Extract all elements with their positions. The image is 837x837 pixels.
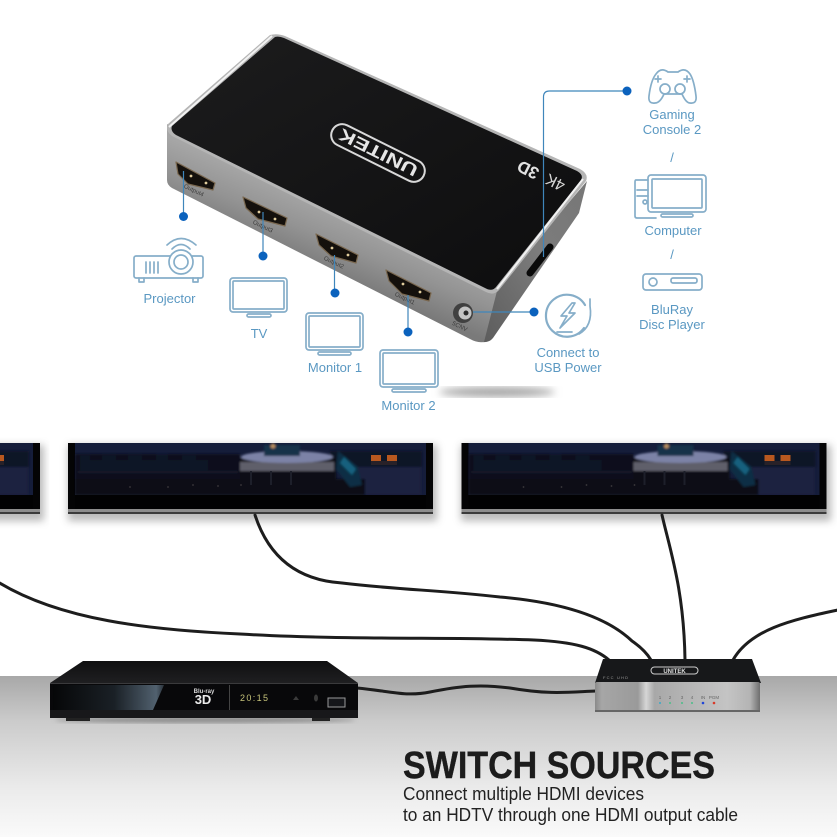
HDMI output port 3 <box>243 197 287 226</box>
device right side <box>482 181 587 342</box>
label: Gaming Console 2: Console 2 <box>643 122 701 137</box>
heading: SWITCH SOURCES <box>403 745 715 787</box>
switch top <box>595 659 761 683</box>
gloss panel <box>53 685 164 710</box>
output labels: Output1 <box>394 292 416 307</box>
output labels: Output3 <box>252 220 274 235</box>
time display: 20:15 <box>240 693 268 703</box>
label: BluRay Disc Player: Disc Player <box>639 317 706 332</box>
panel: small HDMI switch <box>595 659 761 712</box>
output labels <box>183 184 468 333</box>
icon: USB power <box>546 295 591 337</box>
USB slot <box>328 698 345 707</box>
player feet <box>66 718 330 721</box>
indicator labels <box>659 695 719 700</box>
indicator labels: 1 <box>659 695 662 700</box>
label: Connect to USB Power <box>534 345 602 375</box>
Blu-ray 3D mark: Blu-ray <box>194 689 215 695</box>
panel: right TV screen <box>461 443 831 521</box>
UNITEK logo: UNITEK <box>335 124 421 180</box>
UNITEK logo <box>327 120 429 186</box>
icon: Monitor 2 <box>380 350 438 392</box>
cables <box>0 515 837 694</box>
HDMI output port 4 <box>176 162 215 190</box>
indicator labels: 3 <box>681 695 684 700</box>
label: TV: TV <box>251 326 268 341</box>
description: Connect multiple HDMI devices <box>403 784 644 804</box>
panel: HDMI switch device <box>167 34 587 342</box>
HDMI output port 1 <box>386 270 431 301</box>
panel: Blu-ray player <box>50 661 358 723</box>
device drop shadow <box>439 387 555 397</box>
label: BluRay Disc Player <box>639 302 706 332</box>
indicator labels: 2 <box>669 695 672 700</box>
player front <box>50 683 358 710</box>
label: Projector: Projector <box>143 291 196 306</box>
label: Connect to USB Power: Connect to <box>537 345 599 360</box>
label: BluRay Disc Player: BluRay <box>651 302 693 317</box>
device black top <box>172 37 582 290</box>
device front face <box>167 124 497 342</box>
output labels: Output2 <box>323 256 345 271</box>
description: to an HDTV through one HDMI output cable <box>403 805 738 825</box>
icon: BluRay player <box>643 274 702 290</box>
UNITEK small logo <box>651 667 698 675</box>
connector lines <box>179 86 632 336</box>
label: Monitor 1: Monitor 1 <box>308 360 362 375</box>
panel: middle TV screen <box>68 443 437 521</box>
device silver rim <box>167 34 587 294</box>
Blu-ray 3D mark <box>194 689 215 707</box>
LED row <box>659 702 715 704</box>
icon: TV <box>230 278 287 317</box>
Blu-ray 3D mark: 3D <box>195 692 211 707</box>
separator slash: / <box>670 247 674 262</box>
icon: computer <box>635 175 706 218</box>
output labels: Output4 <box>183 184 205 199</box>
label: Monitor 2: Monitor 2 <box>381 398 436 413</box>
UNITEK small logo: UNITEK <box>663 669 686 675</box>
HDMI output port 2 <box>316 234 358 263</box>
player top <box>50 661 358 683</box>
DC power jack <box>453 303 473 323</box>
description <box>403 784 738 825</box>
switch front <box>595 682 760 712</box>
label: Gaming Console 2: Gaming <box>649 107 695 122</box>
small print: FCC UHD <box>603 675 628 680</box>
rim highlights <box>169 36 583 289</box>
icon: projector <box>134 238 203 282</box>
panel: left TV screen <box>0 443 44 521</box>
HDMI input port <box>530 247 550 273</box>
output labels: 5CNV <box>451 321 468 333</box>
icon: gamepad <box>649 70 696 103</box>
icon: Monitor 1 <box>306 313 363 355</box>
separator slash: / <box>670 150 674 165</box>
label: Connect to USB Power: USB Power <box>534 360 602 375</box>
port pins <box>190 175 421 293</box>
indicator labels: PGM <box>709 695 719 700</box>
3D mark: 3D <box>514 156 542 183</box>
label: Gaming Console 2 <box>643 107 701 137</box>
player buttons <box>293 694 318 702</box>
4K mark: 4K <box>543 170 568 194</box>
label: Computer: Computer <box>644 223 702 238</box>
table surface <box>0 676 837 837</box>
indicator labels: IN <box>701 695 705 700</box>
indicator labels: 4 <box>691 695 694 700</box>
